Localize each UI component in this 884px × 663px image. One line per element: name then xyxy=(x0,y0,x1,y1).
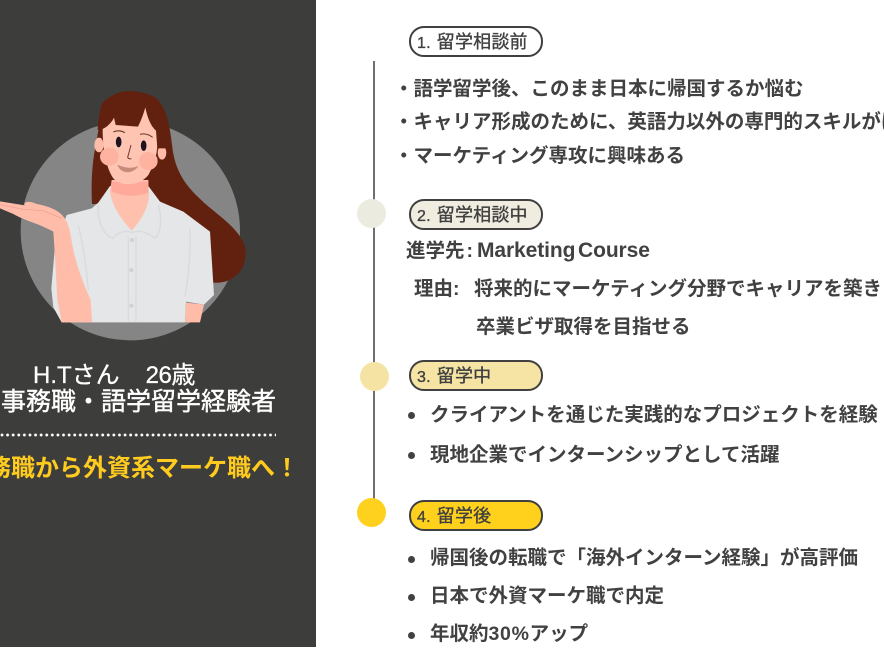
timeline dot 4 xyxy=(357,498,386,527)
timeline line xyxy=(373,61,374,501)
reason label: 理由: xyxy=(414,278,460,300)
right forearm xyxy=(185,303,204,322)
step 2 pill xyxy=(409,199,543,230)
reason line 2: 卒業ビザ取得を目指せる xyxy=(476,316,691,338)
neck and chest xyxy=(110,180,149,231)
neck shadow xyxy=(112,182,148,196)
destination course: 進学先:Marketing Course xyxy=(406,239,650,262)
eyebrows, nose xyxy=(113,131,153,159)
shirt collar lines xyxy=(78,205,190,322)
step 4 text 1: 帰国後の転職で「海外インターン経験」が高評価 xyxy=(430,547,858,569)
dotted divider xyxy=(0,433,276,437)
step 3 bullet dot 2 xyxy=(408,452,415,459)
illustration: woman presenting with open hand xyxy=(0,91,246,340)
mouth xyxy=(117,165,139,172)
step 2 pill: 2. 留学相談中 xyxy=(417,205,528,225)
name and age: H.Tさん 26歳 xyxy=(33,362,195,389)
step 3 bullet dot 1 xyxy=(408,412,415,419)
shirt xyxy=(51,186,214,322)
occupation: 事務職・語学留学経験者 xyxy=(1,388,276,416)
step 3 pill: 3. 留学中 xyxy=(417,366,491,386)
step 4 bullet dot 1 xyxy=(408,556,415,563)
timeline dot 2 xyxy=(357,199,386,228)
ears xyxy=(94,138,104,152)
step 1 bullets xyxy=(394,78,884,167)
step 4 text 3: 年収約30%アップ xyxy=(430,623,588,645)
bullet text 1: ・語学留学後、このまま日本に帰国するか悩む xyxy=(394,78,804,100)
reason text xyxy=(474,278,882,338)
panel: profile sidebar xyxy=(0,0,316,647)
step 4 bullet dot 3 xyxy=(408,632,415,639)
eyes xyxy=(116,137,122,147)
long hair xyxy=(92,91,246,283)
raised arm and hand xyxy=(0,201,92,322)
step 3 text 2: 現地企業でインターンシップとして活躍 xyxy=(430,444,779,466)
bullet text 3: ・マーケティング専攻に興味ある xyxy=(394,145,685,167)
step 4 bullet dot 2 xyxy=(408,594,415,601)
grey circle backdrop xyxy=(21,121,240,340)
step 3 pill xyxy=(409,360,543,391)
shirt buttons xyxy=(129,238,134,308)
cheeks xyxy=(100,148,119,166)
step 3 text 1: クライアントを通じた実践的なプロジェクトを経験 xyxy=(430,404,878,426)
palm lines xyxy=(0,205,62,218)
step 4 pill xyxy=(409,500,543,531)
step 1 pill: 1. 留学相談前 xyxy=(417,32,528,52)
step 1 pill xyxy=(409,26,543,57)
timeline dot 3 xyxy=(360,362,389,391)
step 4 text 2: 日本で外資マーケ職で内定 xyxy=(430,585,664,607)
fringe xyxy=(98,92,172,148)
step 4 pill: 4. 留学後 xyxy=(417,506,491,526)
face xyxy=(103,107,158,184)
reason line 1: 将来的にマーケティング分野でキャリアを築き xyxy=(474,278,882,300)
